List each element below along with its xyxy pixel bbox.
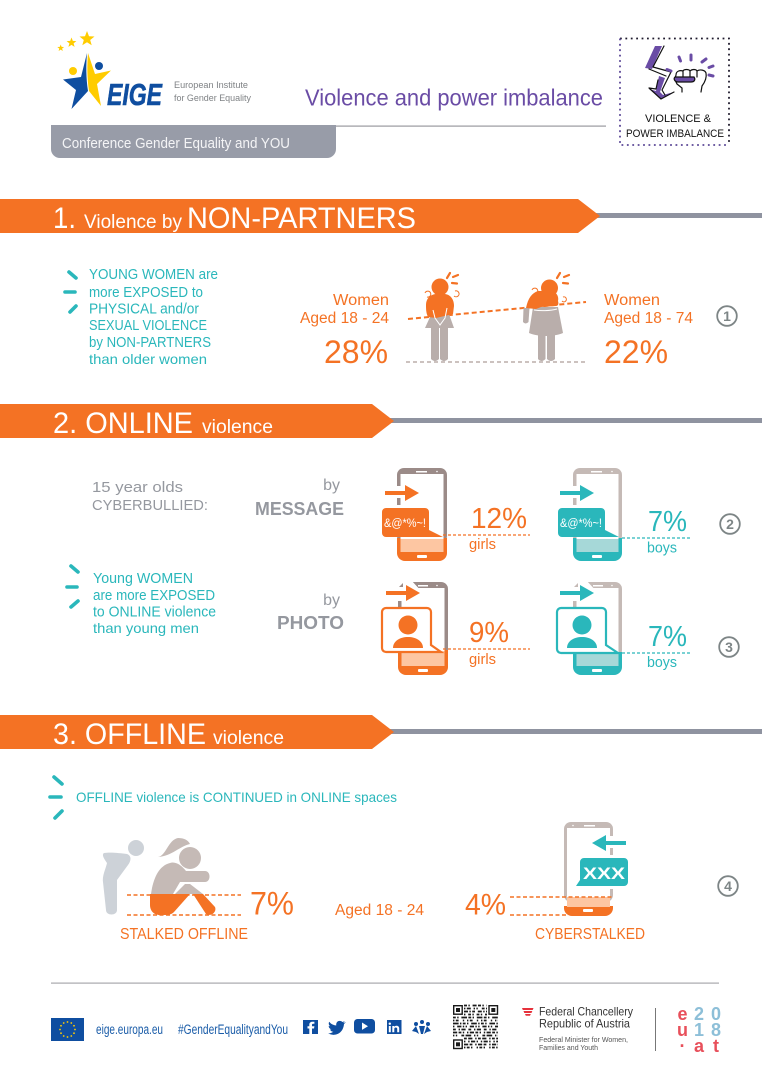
title: Violence and power imbalance — [305, 84, 603, 110]
label: by photo: by — [323, 592, 340, 609]
EU presidency logo: a — [694, 1036, 705, 1056]
conference tab — [51, 125, 336, 158]
header — [51, 31, 729, 158]
label: by message: by — [323, 477, 340, 494]
statement text: than young men — [93, 620, 199, 636]
section 2 banner — [0, 404, 762, 440]
statement text: are more EXPOSED — [93, 588, 215, 604]
reference 1 — [717, 306, 737, 326]
impact marks — [667, 55, 713, 76]
sketch: violence and power imbalance — [620, 38, 729, 145]
fist — [674, 70, 706, 92]
label: by photo: PHOTO — [277, 613, 344, 633]
ministry — [539, 1035, 628, 1052]
section 1 banner: Violence by — [84, 211, 182, 233]
xxx bubble — [576, 858, 628, 886]
dashed level — [443, 648, 530, 650]
value 12%: 12% — [471, 503, 527, 535]
section 3 banner: violence — [213, 727, 284, 749]
xxx bubble: XXX — [583, 864, 626, 883]
message bubble: &@*%~! — [384, 518, 426, 530]
chancellery name — [539, 1004, 633, 1030]
EU presidency logo: 8 — [711, 1020, 721, 1040]
reference 2: 2 — [726, 516, 734, 532]
section 2 banner: violence — [202, 416, 273, 438]
phone — [396, 580, 448, 675]
dashed level — [622, 652, 691, 654]
EU presidency logo — [677, 1004, 721, 1056]
dashed range — [510, 897, 612, 915]
EU presidency logo: 1 — [694, 1020, 704, 1040]
label: by photo — [277, 592, 344, 633]
label girls: girls — [469, 651, 496, 668]
chancellery name: Republic of Austria — [539, 1016, 630, 1030]
phone — [395, 468, 447, 561]
EU presidency logo: · — [680, 1036, 686, 1056]
phone — [571, 580, 622, 675]
EU flag — [51, 1018, 84, 1041]
lightning arrow — [645, 46, 674, 99]
tick marks — [50, 777, 62, 818]
label: women 18-74: 22% — [604, 334, 668, 370]
value 9%: 9% — [469, 617, 509, 649]
label: women 18-24: Aged 18 - 24 — [300, 310, 389, 327]
reference 2 — [720, 514, 740, 534]
panel: online statement — [67, 566, 216, 636]
arrow — [385, 485, 419, 501]
icon: linkedin — [387, 1020, 402, 1034]
label girls: girls — [469, 536, 496, 553]
ministry: Families and Youth — [539, 1043, 598, 1052]
icon: network — [412, 1020, 431, 1034]
logo tagline — [174, 80, 251, 103]
icon: youtube — [354, 1019, 375, 1034]
statement text: by NON-PARTNERS — [89, 335, 211, 351]
logo stars — [57, 31, 94, 51]
arrow — [560, 585, 594, 601]
label: women 18-74: Aged 18 - 74 — [604, 310, 693, 327]
message bubble — [382, 508, 443, 537]
label boys: boys — [647, 654, 677, 671]
figure: young woman — [425, 273, 459, 361]
sketch caption: POWER IMBALANCE — [626, 128, 724, 140]
conference tab: Conference Gender Equality and YOU — [62, 136, 290, 152]
label: by message: MESSAGE — [255, 499, 344, 519]
EU presidency logo: t — [713, 1036, 719, 1056]
logo wordmark: EIGE — [107, 77, 163, 112]
logo figures — [63, 53, 111, 109]
dashed level — [443, 534, 530, 536]
statement text: YOUNG WOMEN are — [89, 267, 218, 283]
label: women 18-74 — [604, 292, 693, 370]
value 7%: 7% — [648, 621, 687, 653]
reference 1: 1 — [723, 308, 731, 324]
EU presidency logo: e — [677, 1004, 688, 1024]
statement text: than older women — [89, 351, 207, 367]
statement text: Young WOMEN — [93, 571, 193, 587]
chancellery name: Federal Chancellery — [539, 1004, 633, 1018]
Austrian chancellery logo — [522, 1004, 633, 1052]
chart: message boys 7% — [558, 468, 740, 561]
header rule — [336, 126, 606, 127]
statement text: OFFLINE violence is CONTINUED in ONLINE spaces — [76, 789, 397, 805]
arrow — [592, 835, 626, 851]
red mark — [522, 1008, 534, 1016]
reference 4: 4 — [724, 878, 732, 894]
label boys: boys — [647, 540, 677, 556]
chart: photo boys 7% — [557, 580, 739, 675]
dashed range — [127, 895, 241, 915]
statement text: PHYSICAL and/or — [89, 302, 199, 318]
phone — [564, 822, 615, 916]
value 7%: 7% — [250, 886, 294, 922]
EU presidency logo: u — [677, 1020, 688, 1040]
reference 3 — [719, 637, 739, 657]
sketch caption: VIOLENCE & — [645, 113, 712, 125]
label cyberstalked: CYBERSTALKED — [535, 926, 645, 943]
trend line — [408, 302, 586, 319]
label: women 18-24 — [300, 292, 389, 370]
value 7%: 7% — [648, 506, 687, 538]
panel: offline statement — [50, 777, 397, 818]
tick marks — [65, 272, 76, 312]
section 1 banner — [0, 199, 762, 235]
text: 15 year olds cyberbullied — [92, 479, 208, 514]
icon: facebook — [303, 1020, 318, 1034]
section 3 banner: 3. OFFLINE — [53, 718, 206, 751]
chart: cyberstalked 4% — [465, 822, 738, 943]
EIGE logo — [57, 31, 251, 112]
section 2 banner: 2. ONLINE — [53, 407, 193, 440]
phone — [571, 468, 622, 561]
website: eige.europa.eu — [96, 1022, 163, 1037]
arrow — [386, 585, 420, 601]
sketch caption — [626, 113, 724, 140]
figure: older woman — [523, 273, 569, 361]
photo bubble — [557, 608, 618, 653]
tick marks — [67, 566, 78, 607]
label: aged 18-24: Aged 18 - 24 — [335, 902, 424, 919]
dotted frame — [620, 38, 729, 145]
photo bubble — [382, 608, 441, 652]
dashed level — [622, 537, 691, 539]
baseline — [406, 361, 586, 363]
text: 15 year olds cyberbullied: 15 year olds — [92, 479, 183, 496]
message bubble: &@*%~! — [560, 518, 602, 530]
chart: photo girls 9% — [382, 580, 530, 675]
value 4%: 4% — [465, 888, 506, 922]
EU presidency logo: 0 — [711, 1004, 721, 1024]
reference 4 — [718, 876, 738, 896]
icon: twitter — [328, 1021, 346, 1035]
label: by message — [255, 477, 344, 519]
EU presidency logo: 2 — [694, 1004, 704, 1024]
chart: women aged 18-24 vs 18-74 — [300, 273, 737, 370]
QR code — [453, 1006, 498, 1048]
statement text — [93, 571, 216, 636]
section 3 banner — [0, 715, 762, 751]
label: women 18-74: Women — [604, 292, 660, 309]
text: 15 year olds cyberbullied: CYBERBULLIED: — [92, 497, 208, 514]
figure: woman sitting — [150, 838, 215, 915]
section 1 banner: 1. — [53, 202, 76, 235]
section 1 banner: NON-PARTNERS — [187, 202, 416, 235]
figure: stalker — [103, 840, 144, 914]
label: women 18-24: Women — [333, 292, 389, 309]
ministry: Federal Minister for Women, — [539, 1035, 628, 1044]
chart: stalked offline 7% — [103, 838, 294, 943]
message bubble — [558, 508, 619, 537]
reference 3: 3 — [725, 639, 733, 655]
logo tagline: for Gender Equality — [174, 93, 251, 103]
statement text: SEXUAL VIOLENCE — [89, 318, 207, 334]
logo tagline: European Institute — [174, 80, 248, 90]
label: women 18-24: 28% — [324, 334, 388, 370]
hashtag: #GenderEqualityandYou — [178, 1022, 288, 1037]
label stalked offline: STALKED OFFLINE — [120, 926, 248, 943]
arrow — [560, 485, 594, 501]
footer — [51, 982, 721, 1056]
panel: non-partners statement — [65, 267, 218, 367]
statement text: to ONLINE violence — [93, 604, 216, 620]
statement text — [89, 267, 218, 367]
statement text: more EXPOSED to — [89, 285, 203, 301]
chart: message girls 12% — [382, 468, 530, 561]
